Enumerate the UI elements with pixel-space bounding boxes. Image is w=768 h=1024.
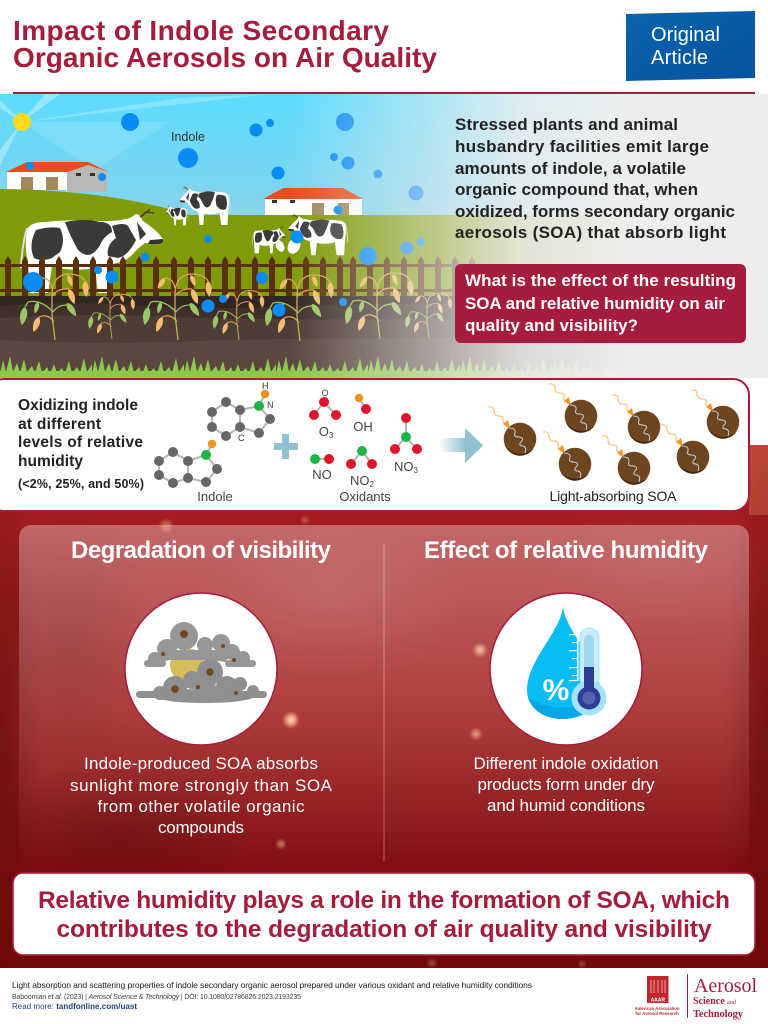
- citation: Light absorption and scattering properties of indole secondary organic aerosol prepared under various oxidant and relative humidity conditions: [12, 980, 532, 990]
- text block: humidity finding: and humid conditions: [487, 796, 645, 815]
- icon: oxidant molecules: O: [321, 388, 329, 398]
- text block: intro: [455, 115, 735, 242]
- text block: intro: organic compound that, when: [455, 180, 698, 199]
- hill and pasture: [0, 189, 640, 300]
- icon: standing cow and calf: [166, 186, 231, 225]
- badge: Original Article: Original: [651, 24, 720, 46]
- label: Oxidants: Oxidants: [339, 489, 391, 504]
- icon: water drop with thermometer: %: [543, 674, 569, 707]
- grass: [0, 352, 640, 378]
- fence: [0, 256, 480, 296]
- text block: intro: Stressed plants and animal: [455, 115, 678, 134]
- text block: visibility finding: Indole-produced SOA absorbs: [84, 754, 318, 773]
- icon: oxidant molecules: NO: [350, 473, 370, 488]
- label: Indole: Indole: [171, 130, 205, 144]
- decorative light specks: [158, 515, 587, 969]
- citation: Read more: tandfonline.com/uast: [12, 1002, 137, 1011]
- citation: Baboomian et al. (2023) | Aerosol Science & Technology | DOI: 10.1080/02786826.2023.2193235: [12, 994, 301, 1001]
- right fade: [290, 94, 768, 378]
- icon: oxidant molecules: O: [319, 424, 329, 439]
- logo: AAAR: AAAR: [651, 998, 665, 1004]
- logo: journal wordmark: [687, 974, 757, 1020]
- callout: research question: What is the effect of the resulting: [465, 271, 736, 290]
- title: Impact of Indole Secondary: [13, 15, 389, 46]
- text block: oxidizing indole: levels of relative: [18, 434, 143, 451]
- text block: visibility finding: [70, 754, 333, 837]
- title: Organic Aerosols on Air Quality: [13, 42, 437, 73]
- badge: Original Article: [626, 11, 755, 81]
- label: Light-absorbing SOA: Light-absorbing SOA: [550, 488, 677, 504]
- text block: humidity finding: products form under dry: [478, 775, 655, 794]
- text block: intro: oxidized, forms secondary organic: [455, 202, 735, 221]
- logo: AAAR: for Aerosol Research: [635, 1011, 679, 1016]
- icon: oxidant molecules: [309, 388, 422, 489]
- icon: upper indole molecule: N: [267, 400, 274, 410]
- logo: journal wordmark: Science and: [693, 996, 736, 1007]
- text block: intro: amounts of indole, a volatile: [455, 159, 686, 178]
- scene: farm with stressed plants and indole emissions: [0, 94, 768, 378]
- text block: visibility finding: sunlight more strongly than SOA: [70, 776, 333, 795]
- icon: reaction arrow: [439, 428, 483, 463]
- title: [13, 15, 437, 73]
- icon: lower indole molecule: [154, 440, 222, 488]
- panel: findings: [19, 515, 749, 969]
- heading: Degradation of visibility: Degradation of visibility: [71, 537, 332, 564]
- callout: research question: [455, 264, 746, 343]
- icon: plus: [274, 434, 298, 459]
- icon: left farmhouse: [6, 162, 109, 192]
- badge: Original Article: Article: [651, 47, 708, 69]
- icon: water drop with thermometer: [490, 593, 642, 745]
- callout: conclusion: [13, 873, 755, 955]
- callout: conclusion: contributes to the degradation of air quality and visibility: [56, 916, 712, 943]
- callout: research question: quality and visibility?: [465, 316, 638, 335]
- text block: humidity finding: [474, 754, 658, 815]
- icon: light-absorbing SOA particles: [488, 384, 739, 485]
- citation: [12, 980, 532, 1011]
- icon: oxidant molecules: 2: [370, 480, 375, 489]
- logo: AAAR: [635, 976, 680, 1016]
- text block: oxidizing indole: [18, 397, 144, 491]
- icon: oxidant molecules: OH: [353, 419, 373, 434]
- icon: oxidant molecules: NO: [312, 467, 332, 482]
- logo: journal wordmark: Technology: [693, 1009, 744, 1020]
- icon: oxidant molecules: 3: [329, 431, 334, 440]
- footer: [0, 968, 768, 1024]
- heading: Effect of relative humidity: Effect of relative humidity: [424, 537, 709, 564]
- icon: right farmhouse: [263, 188, 363, 215]
- text block: oxidizing indole: (<2%, 25%, and 50%): [18, 477, 144, 491]
- soil: [0, 296, 640, 372]
- icon: upper indole molecule: C: [238, 433, 245, 443]
- background: red textured band: [0, 440, 768, 1000]
- text block: humidity finding: Different indole oxidation: [474, 754, 658, 773]
- callout: conclusion: Relative humidity plays a role in the formation of SOA, which: [38, 887, 730, 914]
- icon: oxidant molecules: 3: [414, 466, 419, 475]
- stressed plants: [18, 273, 452, 341]
- text block: oxidizing indole: at different: [18, 416, 101, 433]
- text block: visibility finding: compounds: [158, 818, 244, 837]
- icon: smog clouds over sun: [125, 593, 277, 745]
- label: Indole molecule: Indole: [197, 489, 233, 504]
- icon: large cow: [21, 209, 163, 293]
- icon: upper indole molecule: H: [262, 381, 268, 391]
- text block: intro: aerosols (SOA) that absorb light: [455, 223, 726, 242]
- indole bubbles: [23, 113, 425, 316]
- icon: grazing cow and calf: [253, 214, 348, 256]
- icon: oxidant molecules: NO: [394, 459, 414, 474]
- callout: research question: SOA and relative humidity on air: [465, 294, 725, 313]
- logo: journal wordmark: Aerosol: [694, 975, 757, 997]
- text block: visibility finding: from other volatile organic: [98, 797, 305, 816]
- panel: oxidation process: [0, 379, 749, 511]
- text block: oxidizing indole: humidity: [18, 453, 83, 470]
- logo: AAAR: American Association: [635, 1006, 680, 1011]
- text block: oxidizing indole: Oxidizing indole: [18, 397, 138, 414]
- header rule: [13, 92, 755, 94]
- icon: upper indole molecule: [207, 381, 275, 443]
- text block: intro: husbandry facilities emit large: [455, 137, 709, 156]
- icon: sun with rays: [0, 94, 270, 170]
